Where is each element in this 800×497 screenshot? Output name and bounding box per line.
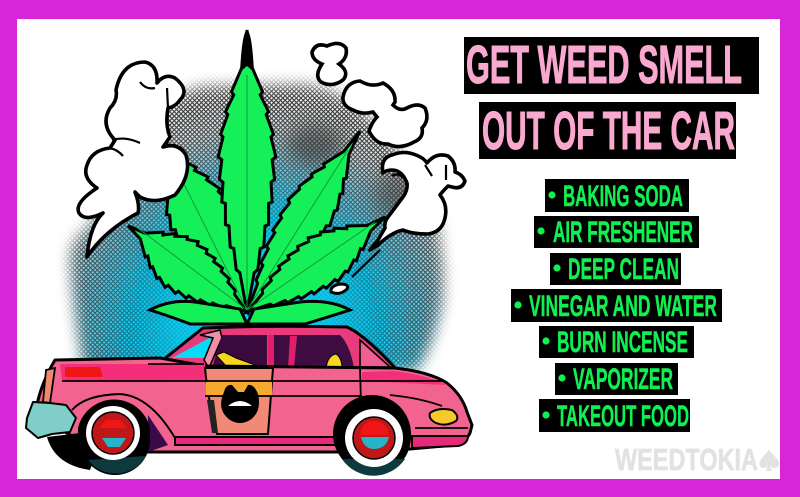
leaflet: lower right (232, 195, 400, 334)
list item: burn incense (539, 326, 694, 359)
car: open door (205, 368, 273, 434)
car: crumpled front bumper (26, 402, 76, 438)
list item: air freshener: AIR FRESHENER (553, 216, 693, 249)
car: red front marker lamp (65, 367, 103, 377)
car: upper hot pink band (60, 364, 446, 385)
list item: baking soda: BAKING SODA (563, 180, 683, 213)
list item: burn incense: BURN INCENSE (557, 326, 688, 359)
list item: takeout food: TAKEOUT FOOD (557, 400, 689, 433)
car: rear passenger seat (326, 354, 342, 368)
list item: vaporizer (555, 363, 678, 396)
list item: air freshener (534, 216, 699, 249)
cannabis leaf (111, 30, 400, 335)
car: front arch shadow (148, 415, 168, 452)
pink car (26, 326, 472, 476)
smoke cloud: right with tail (370, 152, 465, 250)
car: body lines (62, 364, 468, 440)
leaf veins (135, 75, 375, 310)
watermark: WEEDTOKIA (615, 442, 758, 477)
list item: takeout food (539, 399, 690, 433)
smoke tail streak (352, 250, 380, 277)
smoke puff: tail end (331, 284, 348, 293)
list of methods (511, 179, 722, 433)
smoke cloud: large left (78, 62, 188, 257)
leaflet: centre tip (240, 30, 254, 72)
leaflet: upper right (226, 118, 381, 325)
list item: deep clean: DEEP CLEAN (568, 253, 679, 286)
car: front underside shadow (47, 430, 105, 470)
car: rear bumper (412, 436, 468, 448)
car: door dark wedge (207, 400, 218, 433)
car: driver (216, 352, 255, 368)
list item: deep clean (550, 253, 681, 286)
halftone background burst (59, 72, 454, 372)
smoke cloud: middle right (343, 81, 427, 147)
leaflet: upper left (132, 123, 276, 326)
car: body (36, 358, 472, 452)
car: rear window (272, 335, 354, 368)
leaflet: centre (218, 30, 276, 312)
car: rear wheel (333, 395, 411, 476)
list item: vaporizer: VAPORIZER (573, 363, 673, 396)
car: windshield and roof frame (163, 326, 397, 370)
leaflet: bottom right (247, 301, 350, 324)
leaflet: lower left (111, 203, 264, 335)
car: front fender line (72, 394, 175, 438)
car: windshield glass (172, 335, 215, 358)
list item: baking soda (545, 179, 689, 213)
car: door orange band (206, 382, 272, 396)
car: door emblem highlight (228, 401, 252, 406)
car: windshield pillar (200, 330, 222, 368)
car: yellow tail light (430, 409, 457, 425)
list item: vinegar and water (511, 289, 722, 323)
icon: spade (759, 450, 779, 471)
car: rear quarter window (360, 340, 390, 367)
car: headlight (43, 368, 55, 403)
car: lower sill (175, 437, 338, 445)
car: window pillar (268, 335, 297, 368)
leaflet: bottom left (150, 301, 247, 324)
smoke cloud: small top (312, 43, 346, 85)
car: front wheel (78, 400, 150, 475)
title (464, 35, 759, 161)
car: door dark emblem (221, 385, 259, 423)
car: front window (212, 335, 267, 368)
